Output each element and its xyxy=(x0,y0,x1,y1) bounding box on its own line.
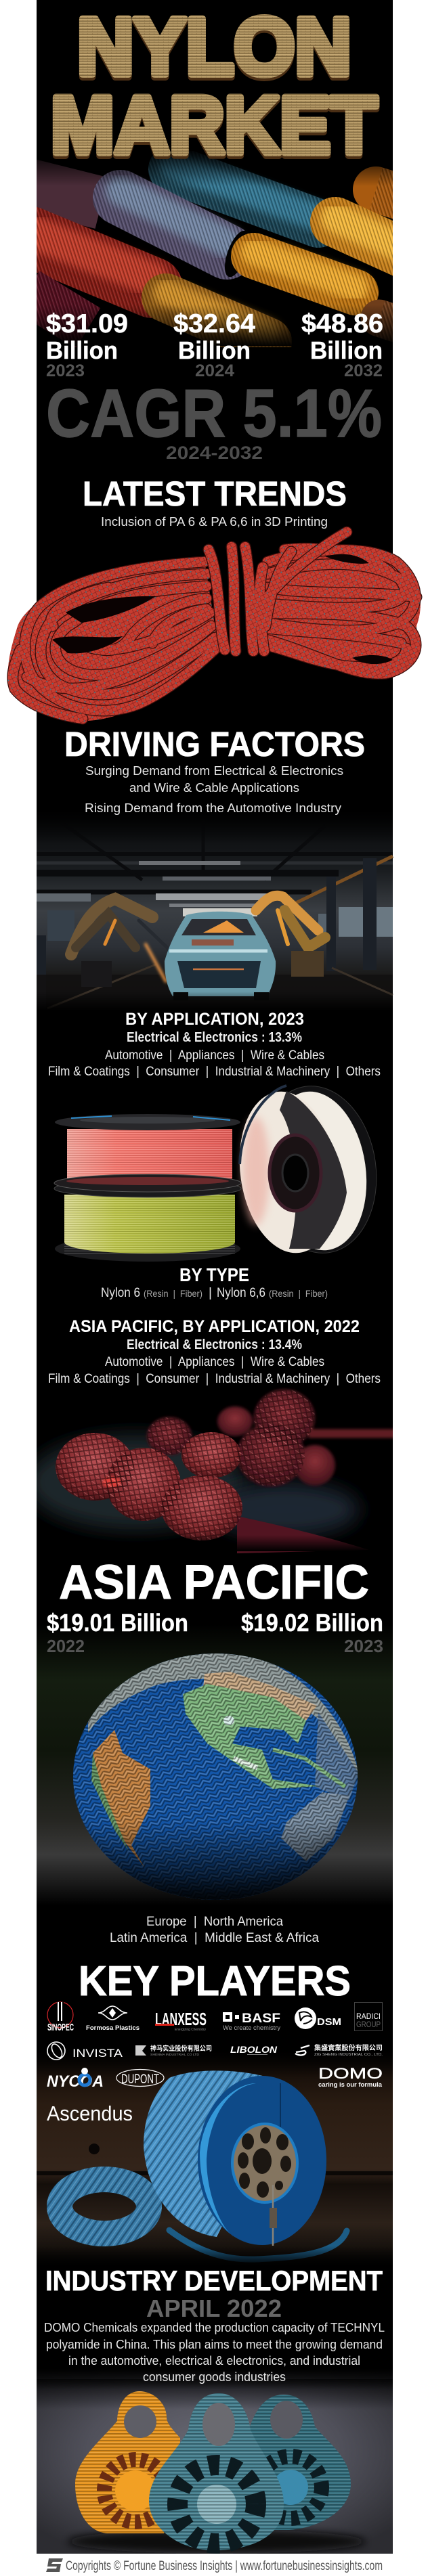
factory top fade xyxy=(37,809,393,843)
right ocean shade xyxy=(315,1712,359,1800)
logo: Shenma: 神马实业股份有限公司 xyxy=(150,2044,212,2053)
asia pacific stats: 2022 xyxy=(47,1636,85,1656)
development text: in the automotive, electrical & electronics, and industrial xyxy=(68,2353,360,2368)
type list xyxy=(101,1286,328,1300)
type list: Nylon 6 xyxy=(101,1286,140,1300)
section: by type xyxy=(101,1264,328,1300)
roll: middle yellow xyxy=(254,252,356,292)
green spool xyxy=(55,1195,240,1262)
logo: Sinopec: SINOPEC xyxy=(47,2022,74,2033)
car body shell xyxy=(165,912,276,1000)
development text: consumer goods industries xyxy=(143,2370,286,2384)
section: asia pacific by application xyxy=(48,1317,381,1386)
segment list: Film & Coatings | Consumer | Industrial & Machinery | Others xyxy=(48,1372,381,1386)
knit texture xyxy=(68,1651,366,1902)
stat 2032 xyxy=(301,309,383,380)
logo: Domo: DOMO xyxy=(318,2065,383,2082)
driving factors text: Rising Demand from the Automotive Industry xyxy=(85,801,342,815)
bag top fade xyxy=(37,2379,393,2389)
logo: Radici Group xyxy=(355,2002,382,2030)
heading: BY TYPE xyxy=(179,1264,249,1285)
ceiling beams xyxy=(37,819,393,892)
stat 2032: Billion xyxy=(310,336,383,364)
stat 2023 xyxy=(46,309,128,380)
section: by application 2023 xyxy=(48,1010,381,1079)
heading: key players: KEY PLAYERS xyxy=(79,1958,351,2005)
roll end hole xyxy=(225,230,248,277)
hero top fade xyxy=(37,151,393,184)
logo: Domo: caring is our formula xyxy=(318,2081,383,2089)
heading: BY APPLICATION, 2023 xyxy=(125,1010,304,1029)
logo: Domo xyxy=(318,2065,383,2089)
blue reel disc xyxy=(198,2076,326,2245)
logo: Formosa Plastics xyxy=(86,2006,140,2032)
development text: DOMO Chemicals expanded the production capacity of TECHNYL xyxy=(44,2320,385,2334)
logo: DSM: DSM xyxy=(317,2016,341,2028)
heading: latest trends: LATEST TRENDS xyxy=(83,474,347,513)
image: car factory xyxy=(37,809,393,1012)
logo: Zig Sheng xyxy=(295,2043,383,2057)
asia pacific stats: 2023 xyxy=(344,1636,383,1656)
trend text: Inclusion of PA 6 & PA 6,6 in 3D Printing xyxy=(101,514,328,529)
stat 2024: $32.64 xyxy=(173,309,255,338)
title text xyxy=(51,1,377,171)
right robot arm xyxy=(256,895,325,977)
logo: Shenma xyxy=(135,2044,212,2056)
hero bottom fade xyxy=(37,305,393,347)
roll: dim maroon xyxy=(20,183,102,203)
pillars xyxy=(37,858,377,1010)
logo: Nycoa: NYCOA xyxy=(47,2072,104,2091)
logo: BASF xyxy=(223,2012,280,2032)
logo: BASF: BASF xyxy=(242,2012,280,2026)
roll: lower right brown xyxy=(379,318,420,332)
logo: Radici Group: RADICI xyxy=(356,2012,381,2021)
logo: DuPont: DUPONT xyxy=(121,2072,159,2087)
asia pacific stats: $19.01 Billion xyxy=(47,1609,188,1637)
stat 2023: 2023 xyxy=(46,361,85,380)
floor shadow xyxy=(68,2529,366,2554)
title shadow: MARKET xyxy=(51,83,377,173)
left robot arm xyxy=(71,899,171,987)
heading: asia pacific: ASIA PACIFIC xyxy=(59,1556,369,1609)
logo: Ascendus: Ascendus xyxy=(47,2102,133,2125)
other regions xyxy=(110,1914,319,1945)
segment list xyxy=(48,1048,381,1079)
front teal bag xyxy=(149,2393,284,2550)
logo: BASF: We create chemistry xyxy=(223,2024,280,2032)
hook xyxy=(272,2185,274,2246)
stat 2024: Billion xyxy=(178,336,251,364)
image: filament spools xyxy=(54,1078,387,1262)
type list: (Resin | Fiber) xyxy=(269,1288,328,1299)
driving factors text xyxy=(85,763,343,815)
red spool xyxy=(54,1114,241,1197)
footer xyxy=(46,2558,383,2573)
title text: MARKET xyxy=(51,80,377,171)
rope drum xyxy=(144,2070,291,2237)
green land xyxy=(183,1684,320,1789)
development date: APRIL 2022 xyxy=(146,2294,282,2322)
roll: upper-right yellow xyxy=(335,218,420,261)
white spool xyxy=(230,1078,387,1261)
stat 2024 xyxy=(173,309,255,380)
arctic cap xyxy=(88,1653,359,1773)
segment list xyxy=(48,1355,381,1386)
segment list: Automotive | Appliances | Wire & Cables xyxy=(105,1048,324,1063)
title: Nylon Market xyxy=(51,1,377,173)
stat 2032: 2032 xyxy=(344,361,383,380)
logo: Sinopec xyxy=(47,2002,74,2033)
logo: Radici Group: GROUP xyxy=(356,2020,381,2029)
title text: NYLON xyxy=(77,1,351,92)
driving factors text: and Wire & Cable Applications xyxy=(129,780,299,795)
logo: Lanxess xyxy=(155,2009,207,2032)
logo: Lanxess: LANXESS xyxy=(155,2009,207,2029)
roll: teal xyxy=(173,165,318,223)
heading: ASIA PACIFIC, BY APPLICATION, 2022 xyxy=(69,1317,360,1336)
bag backdrop xyxy=(37,2369,393,2554)
back teal bag xyxy=(250,2395,351,2530)
CAGR figure: CAGR 5.1% xyxy=(46,376,382,451)
image: red rope knots xyxy=(27,1390,396,1553)
roll: top-right orange xyxy=(376,190,420,203)
globe shading xyxy=(73,1653,358,1900)
logo: Shenma: SHENMA INDUSTRIAL CO LTD xyxy=(150,2053,200,2056)
title shadow: NYLON xyxy=(77,4,351,95)
other regions: Latin America | Middle East & Africa xyxy=(110,1930,319,1945)
orange beam xyxy=(295,856,393,904)
rope mass xyxy=(8,546,421,721)
logo: Invista xyxy=(47,2042,123,2060)
segment list: Automotive | Appliances | Wire & Cables xyxy=(105,1355,324,1369)
left rope coil xyxy=(60,2179,149,2234)
footer icon xyxy=(46,2558,63,2572)
roll: red xyxy=(30,231,152,288)
hero image: spools of thread xyxy=(37,152,393,347)
logo: Lanxess: Energizing Chemistry xyxy=(175,2028,206,2032)
asia pacific stats: $19.02 Billion xyxy=(241,1609,383,1637)
logo: Formosa Plastics: Formosa Plastics xyxy=(86,2024,140,2032)
development text: polyamide in China. This plan aims to meet the growing demand xyxy=(46,2337,383,2351)
knot backdrop glow xyxy=(27,1435,244,1530)
CAGR period: 2024-2032 xyxy=(166,443,263,463)
logo: Libolon: LIBOLON xyxy=(230,2044,278,2055)
logo: Invista: INVISTA xyxy=(72,2047,123,2060)
white highlights xyxy=(234,1758,257,1768)
type list: (Resin | Fiber) xyxy=(144,1288,202,1299)
stat 2032: $48.86 xyxy=(301,309,383,338)
factory bottom fade xyxy=(37,992,393,1012)
development text xyxy=(44,2320,385,2384)
image: blue rope reel xyxy=(37,2051,393,2266)
heading: industry development: INDUSTRY DEVELOPMENT xyxy=(45,2265,383,2296)
orange bag xyxy=(75,2391,180,2533)
wall and floor xyxy=(37,2051,393,2266)
roll: deep maroon xyxy=(27,291,88,328)
leading segment: Electrical & Electronics : 13.4% xyxy=(127,1337,302,1352)
rope tail xyxy=(169,2230,347,2259)
image: red nylon rope xyxy=(8,532,421,721)
globe ball xyxy=(73,1653,358,1900)
orange land xyxy=(93,1730,150,1868)
segment list: Film & Coatings | Consumer | Industrial & Machinery | Others xyxy=(48,1065,381,1079)
reel hub xyxy=(231,2123,299,2204)
top fade xyxy=(37,2051,393,2078)
image: crochet bags xyxy=(37,2369,393,2554)
stat 2023: $31.09 xyxy=(46,309,128,338)
islands xyxy=(273,1750,345,1787)
logo: Zig Sheng: ZIG SHENG INDUSTRIAL CO., LTD. xyxy=(314,2053,383,2057)
other regions: Europe | North America xyxy=(146,1914,283,1929)
logo: Zig Sheng: 集盛實業股份有限公司 xyxy=(314,2043,383,2052)
bottom fade xyxy=(37,2246,393,2266)
tan land xyxy=(203,1672,317,1723)
roll: blue-gray xyxy=(121,191,227,252)
logo: DSM xyxy=(295,2007,341,2029)
knot bottom fade xyxy=(182,1536,369,1551)
stat 2023: Billion xyxy=(46,336,118,364)
market size stats xyxy=(46,309,383,380)
driving factors text: Surging Demand from Electrical & Electronics xyxy=(85,763,343,778)
windows xyxy=(37,861,393,941)
near knots xyxy=(56,1432,369,1553)
logo: DuPont xyxy=(116,2070,164,2087)
asia pacific stats xyxy=(47,1609,383,1656)
floor xyxy=(37,975,393,1010)
heading: driving factors: DRIVING FACTORS xyxy=(64,725,365,763)
stat 2024: 2024 xyxy=(195,361,234,380)
rope gaps xyxy=(52,554,393,664)
type list: | xyxy=(209,1286,212,1300)
far knots xyxy=(147,1390,396,1486)
roll: lower orange xyxy=(166,292,268,342)
globe backdrop xyxy=(37,1624,393,1905)
knot texture xyxy=(56,1390,315,1540)
title shadow xyxy=(51,4,377,173)
company logos xyxy=(47,2002,383,2125)
image: knitted globe xyxy=(37,1624,393,1905)
gray land xyxy=(281,1792,349,1861)
leading segment: Electrical & Electronics : 13.3% xyxy=(127,1030,302,1045)
type list: Nylon 6,6 xyxy=(217,1286,265,1300)
